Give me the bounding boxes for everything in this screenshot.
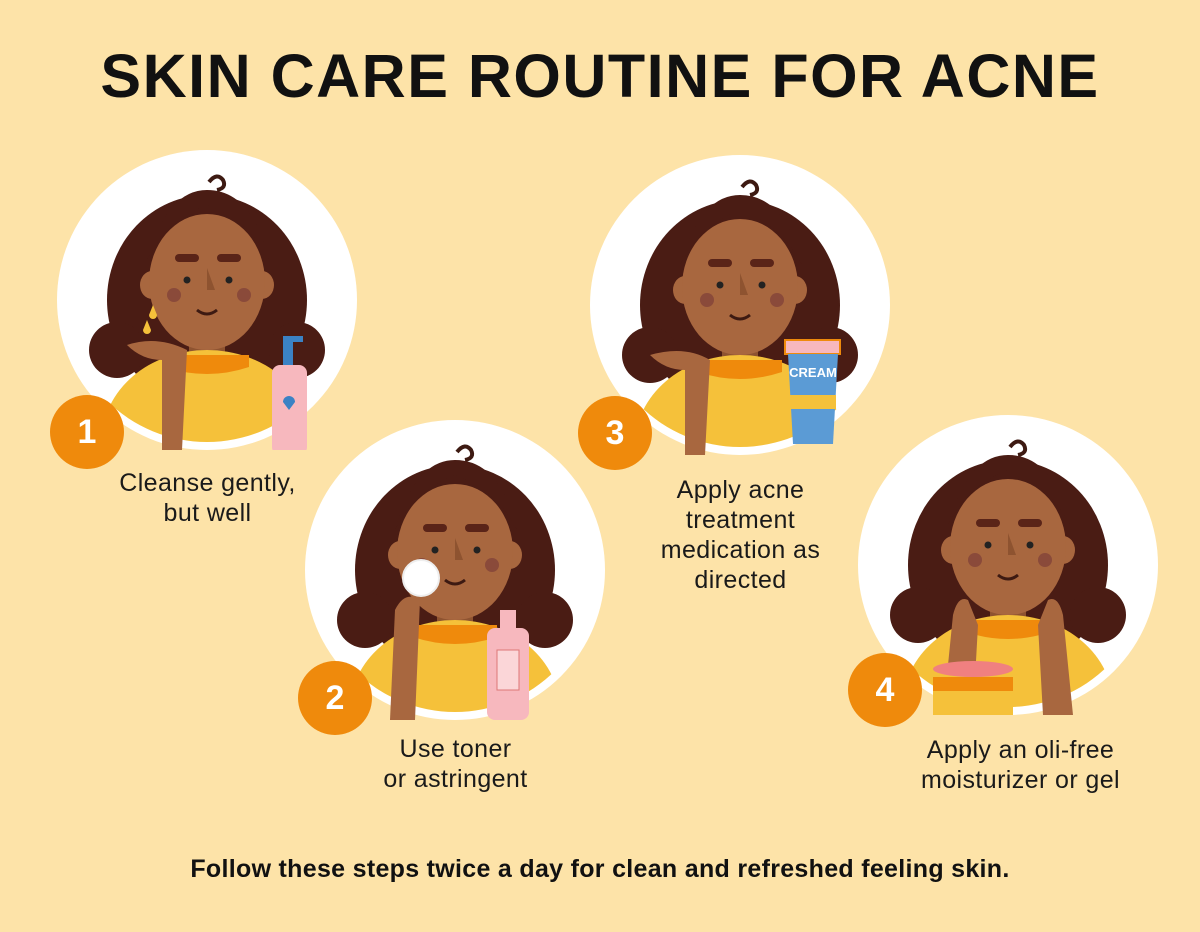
badge 1: 1 — [78, 413, 96, 451]
caption 4: Apply an oli-free — [927, 736, 1114, 764]
panel: step 2 — [298, 420, 605, 793]
caption 1 — [119, 469, 296, 527]
caption 3: Apply acne — [677, 476, 804, 504]
caption 1: Cleanse gently, — [119, 469, 296, 497]
caption 2: or astringent — [383, 765, 528, 793]
badge 3: 3 — [606, 414, 624, 452]
panel: step 3 — [578, 155, 890, 594]
caption 3: treatment — [686, 506, 795, 534]
badge 4: 4 — [876, 671, 894, 709]
caption 3 — [661, 476, 820, 594]
illustration: moisturizer — [858, 415, 1158, 715]
caption 2: Use toner — [400, 735, 512, 763]
illustration: cleanser — [57, 150, 357, 450]
title: SKIN CARE ROUTINE FOR ACNE — [100, 42, 1100, 110]
caption 2 — [383, 735, 528, 793]
footer note: Follow these steps twice a day for clean and refreshed feeling skin. — [190, 855, 1010, 883]
illustration: cream — [590, 155, 890, 455]
badge 2: 2 — [326, 679, 344, 717]
caption 1: but well — [164, 499, 251, 527]
caption 3: directed — [694, 566, 787, 594]
badge 4 — [848, 653, 922, 727]
panel: step 1 — [50, 150, 357, 527]
badge 1 — [50, 395, 124, 469]
badge 2 — [298, 661, 372, 735]
caption 4 — [921, 736, 1120, 794]
badge 3 — [578, 396, 652, 470]
panel: step 4 — [848, 415, 1158, 794]
caption 3: medication as — [661, 536, 820, 564]
illustration: cream: CREAM — [789, 365, 837, 380]
illustration: toner — [305, 420, 605, 720]
caption 4: moisturizer or gel — [921, 766, 1120, 794]
